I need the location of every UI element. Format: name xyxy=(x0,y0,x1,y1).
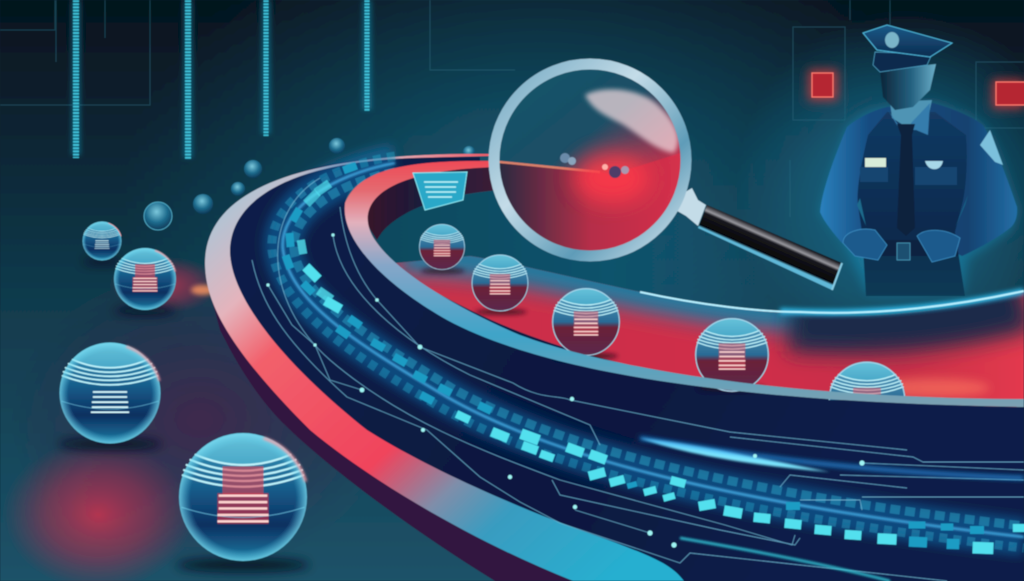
background circuit frames xyxy=(0,0,1024,217)
data pillars xyxy=(76,0,367,160)
magnifying glass lens xyxy=(499,70,682,252)
sphere: middle left xyxy=(114,248,176,310)
floating data screen xyxy=(413,172,467,210)
floor sphere 5, partly hidden xyxy=(828,360,906,401)
floor sphere 1 xyxy=(419,224,465,270)
officer: cap band xyxy=(873,52,932,72)
officer: cap top xyxy=(863,25,952,57)
lens: tiny spheres xyxy=(560,153,629,178)
sphere shadows xyxy=(58,259,309,572)
magnifying glass handle xyxy=(672,188,842,290)
officer: tie xyxy=(897,124,915,236)
sphere: back left xyxy=(82,222,122,260)
floor sphere 3 xyxy=(552,288,620,356)
floor sphere 2 xyxy=(472,254,528,312)
officer: neck and collar xyxy=(890,100,932,128)
ground glows xyxy=(3,257,390,581)
glowing streak xyxy=(640,438,1024,581)
data tiles xyxy=(282,162,1024,554)
data stripe xyxy=(272,156,1024,554)
sphere: large front xyxy=(179,433,307,561)
red floor xyxy=(396,255,1024,408)
officer: cap badge xyxy=(885,32,899,48)
inner teal floor xyxy=(377,190,790,320)
officer: belt xyxy=(866,240,958,256)
small floating spheres xyxy=(144,138,475,230)
track belt xyxy=(225,157,1024,581)
officer: hands xyxy=(843,229,887,260)
lens: highlight xyxy=(585,89,678,153)
floor sphere 4 xyxy=(695,318,769,392)
lens: red glow xyxy=(574,152,650,204)
sphere: large left xyxy=(60,342,160,444)
inner strip xyxy=(345,161,1024,407)
circuit nodes xyxy=(266,233,865,548)
track underside xyxy=(205,263,620,581)
outer red band xyxy=(205,154,684,581)
magnifying glass rim xyxy=(494,64,686,256)
officer: face xyxy=(880,64,936,110)
officer: pockets xyxy=(860,167,957,185)
officer: torso xyxy=(858,112,967,296)
lens: ledge line xyxy=(490,161,600,172)
officer xyxy=(820,25,1018,296)
officer: arm gaps xyxy=(857,195,968,228)
officer: chest badge xyxy=(925,161,943,169)
red screens xyxy=(808,69,1024,109)
officer: name tag xyxy=(865,158,886,167)
floor sphere shadows xyxy=(421,268,766,392)
officer: shoulder patch xyxy=(980,130,1003,165)
lens: lower ledge xyxy=(500,153,680,251)
inner well wall xyxy=(358,165,500,240)
glowing edge line xyxy=(640,291,1024,313)
circuit traces xyxy=(252,178,1024,581)
officer: glow outline xyxy=(820,103,1018,293)
officer: sleeves and shoulders xyxy=(820,103,1017,256)
